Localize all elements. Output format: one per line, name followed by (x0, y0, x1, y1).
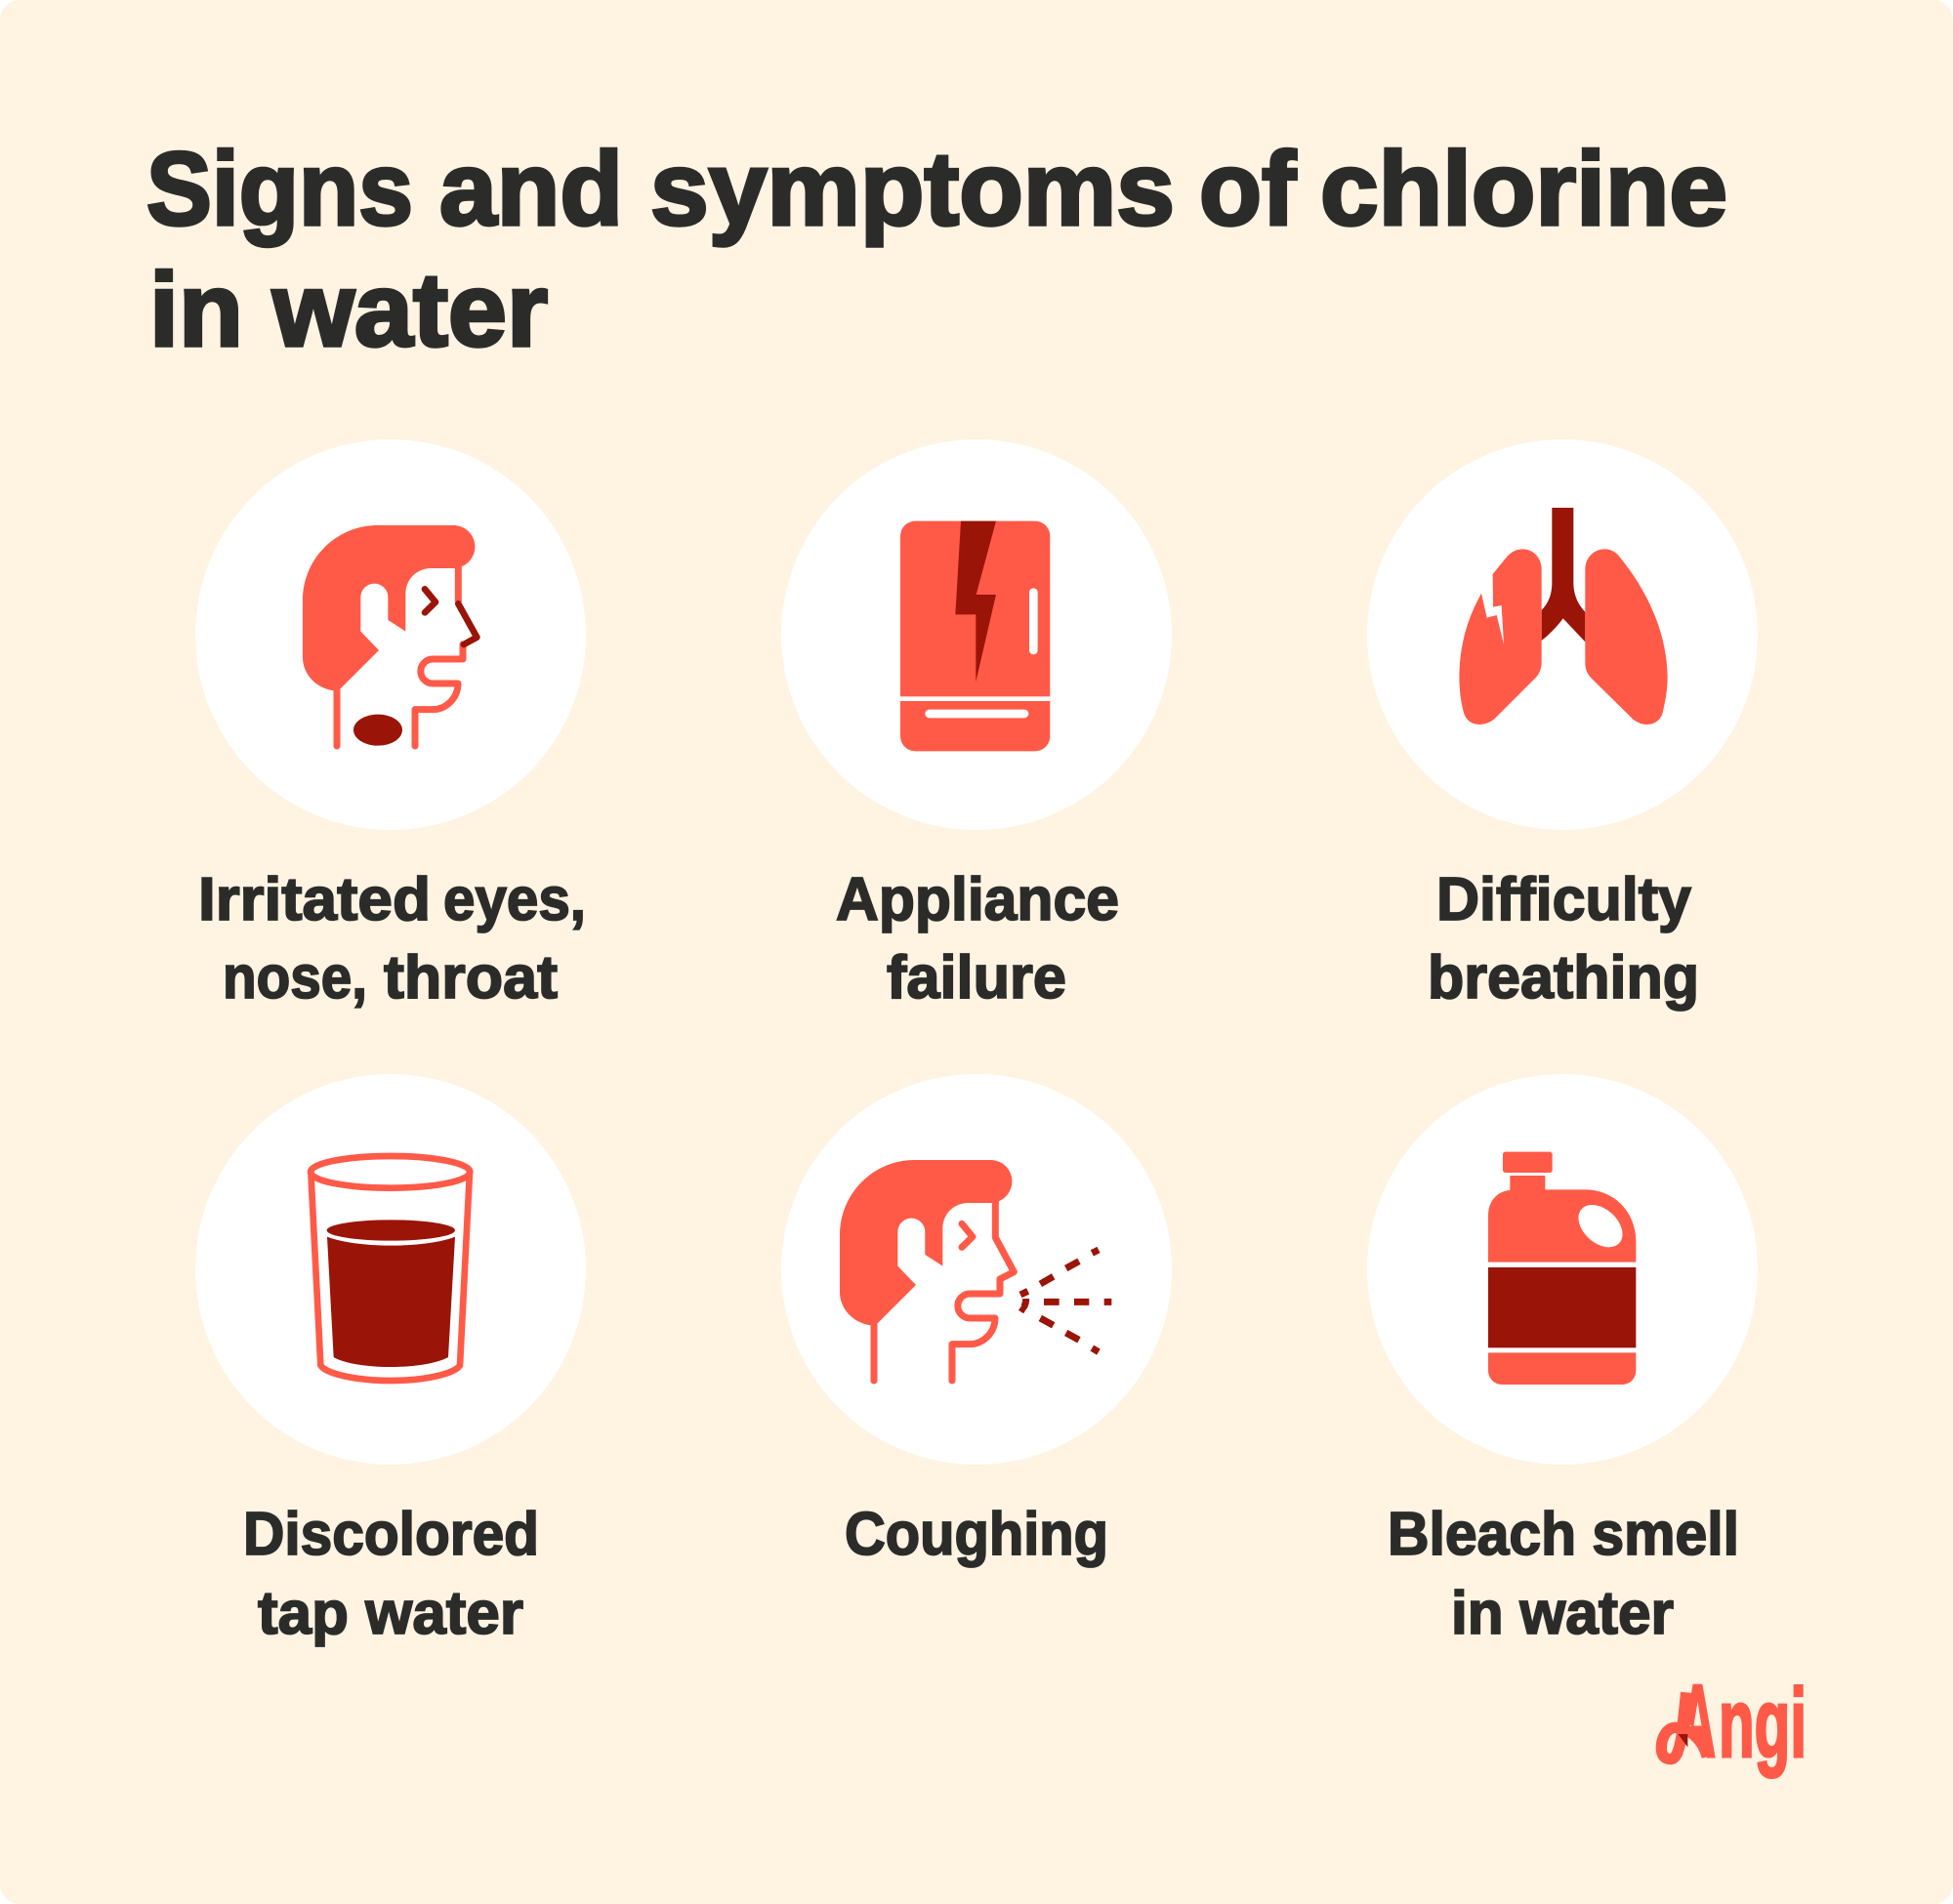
panel: bleach smell in water (1367, 1074, 1758, 1647)
label (1428, 866, 1699, 1012)
panel: coughing (781, 1074, 1172, 1568)
label: tap water (258, 1580, 523, 1647)
title: in water (149, 251, 548, 368)
icon: head with irritated eyes (303, 525, 477, 746)
label: Discolored (243, 1501, 539, 1568)
panel: irritated eyes, nose, throat (195, 439, 586, 1012)
label (243, 1501, 539, 1647)
icon: glass of discolored water (311, 1156, 470, 1381)
icon: cracked fridge (900, 521, 1050, 751)
title: of (1199, 130, 1296, 247)
panel: appliance failure (781, 439, 1172, 1012)
panel: difficulty breathing (1367, 439, 1758, 1012)
logo: Angi: A (1680, 1664, 1716, 1779)
title: chlorine (1320, 130, 1727, 247)
label: breathing (1428, 944, 1699, 1012)
label: Coughing (845, 1501, 1108, 1568)
label: Irritated (198, 866, 431, 933)
title (146, 130, 1727, 368)
label: failure (887, 944, 1066, 1012)
label: eyes, (443, 866, 586, 933)
icon: lungs (1459, 508, 1668, 724)
label: nose, (223, 944, 367, 1012)
label: throat (384, 944, 558, 1012)
label: Bleach smell (1388, 1501, 1739, 1568)
label: in water (1451, 1580, 1674, 1647)
label: Appliance (836, 866, 1119, 933)
logo: Angi: ngi (1719, 1669, 1807, 1778)
label: Difficulty (1436, 866, 1692, 933)
title: symptoms (650, 130, 1175, 247)
icon: coughing head (840, 1160, 1111, 1381)
title: Signs (146, 130, 413, 247)
label (198, 866, 586, 1012)
icon: bleach jug (1488, 1152, 1636, 1385)
label (836, 866, 1119, 1012)
title: and (439, 130, 623, 247)
panel: discolored tap water (195, 1074, 586, 1647)
logo: Angi (1656, 1683, 1804, 1779)
label (1388, 1501, 1739, 1647)
